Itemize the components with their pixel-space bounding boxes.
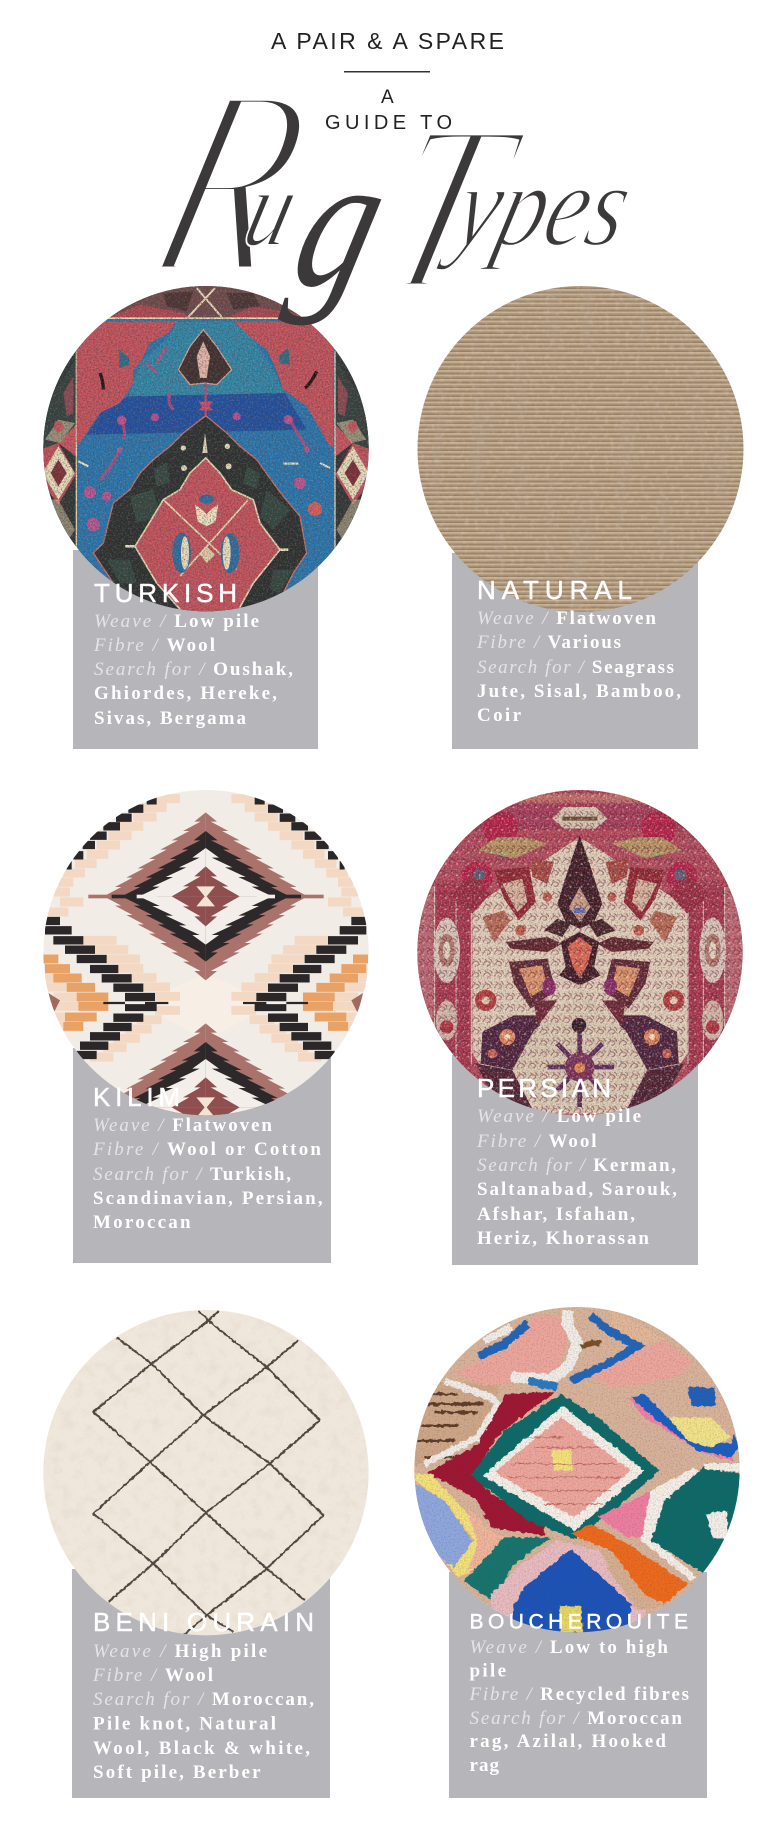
heading: kilim: KILIM (93, 1082, 180, 1112)
rug image: beni ourain (40, 1307, 373, 1640)
details: beni ourain: Fibre / Wool (92, 1665, 213, 1686)
details: beni ourain: Search for / Moroccan, (93, 1689, 314, 1710)
heading: boucherouite: BOUCHEROUITE (470, 1611, 688, 1634)
box: natural (452, 553, 698, 749)
details: persian: Saltanabad, Sarouk, (477, 1179, 677, 1200)
box: persian (452, 1055, 698, 1265)
details: boucherouite (468, 1637, 689, 1776)
details: kilim (92, 1115, 323, 1233)
details: turkish: Ghiordes, Hereke, (94, 683, 277, 704)
details: beni ourain (92, 1641, 314, 1783)
details: natural: Weave / Flatwoven (477, 608, 656, 629)
details: kilim: Weave / Flatwoven (93, 1115, 272, 1136)
details: natural: Search for / Seagrass (477, 657, 674, 678)
heading: turkish: TURKISH (94, 578, 237, 608)
details: natural: Jute, Sisal, Bamboo, (477, 681, 681, 702)
details: beni ourain: Weave / High pile (93, 1641, 267, 1662)
details: natural: Fibre / Various (476, 632, 621, 653)
rug image: turkish (40, 283, 373, 616)
details: persian: Search for / Kerman, (477, 1155, 676, 1176)
box: beni ourain (72, 1569, 330, 1798)
details: boucherouite: rag (470, 1755, 500, 1776)
details: persian: Weave / Low pile (477, 1106, 641, 1127)
details: beni ourain: Pile knot, Natural (93, 1714, 276, 1734)
details: turkish: Sivas, Bergama (94, 708, 246, 729)
rug image: natural (410, 280, 750, 620)
heading: natural: NATURAL (477, 575, 632, 605)
panel: kilim text (92, 1082, 323, 1233)
rug image: kilim (43, 790, 368, 1116)
details: turkish (93, 611, 293, 729)
details: persian: Afshar, Isfahan, (477, 1204, 635, 1225)
header brand: A PAIR & A SPARE (271, 28, 504, 54)
rug image: persian (414, 787, 747, 1120)
intro line guide to: GUIDE TO (325, 112, 452, 134)
details: persian: Fibre / Wool (476, 1131, 596, 1152)
box: turkish (73, 550, 318, 749)
details: boucherouite: Weave / Low to high (470, 1637, 668, 1658)
panel: turkish text (93, 578, 293, 729)
details: turkish: Fibre / Wool (93, 635, 215, 656)
details: persian (476, 1106, 677, 1249)
panel: persian text (476, 1073, 677, 1249)
intro line A: A (381, 87, 394, 108)
rug image: boucherouite (411, 1304, 744, 1637)
details: boucherouite: Search for / Moroccan (470, 1708, 682, 1729)
box: kilim (73, 1048, 331, 1263)
details: kilim: Search for / Turkish, (93, 1164, 291, 1185)
header rule (344, 71, 430, 72)
panel: natural text (476, 575, 681, 726)
details: persian: Heriz, Khorassan (477, 1228, 649, 1249)
details: beni ourain: Soft pile, Berber (93, 1762, 261, 1783)
details: boucherouite: Fibre / Recycled fibres (468, 1684, 689, 1705)
details: beni ourain: Wool, Black & white, (93, 1738, 310, 1759)
details: turkish: Weave / Low pile (94, 611, 259, 632)
heading: beni ourain: BENI OURAIN (93, 1607, 314, 1637)
details: boucherouite: rag, Azilal, Hooked (470, 1731, 666, 1752)
title: Rug Types script: g (276, 116, 408, 327)
title: Rug Types script: u (233, 148, 310, 270)
details: kilim: Fibre / Wool or Cotton (92, 1139, 321, 1160)
box: boucherouite (449, 1572, 707, 1798)
details: natural: Coir (477, 705, 522, 726)
details: boucherouite: pile (470, 1661, 506, 1682)
details: turkish: Search for / Oushak, (94, 659, 293, 680)
title: Rug Types script: R (122, 32, 336, 331)
heading: persian: PERSIAN (477, 1073, 611, 1103)
details: kilim: Moroccan (93, 1212, 191, 1233)
panel: boucherouite text (468, 1611, 689, 1776)
panel: beni ourain text (92, 1607, 314, 1783)
details: natural (476, 608, 681, 726)
title: Rug Types script: T (354, 75, 544, 341)
details: kilim: Scandinavian, Persian, (93, 1188, 323, 1209)
title: Rug Types script: ypes (434, 140, 645, 271)
